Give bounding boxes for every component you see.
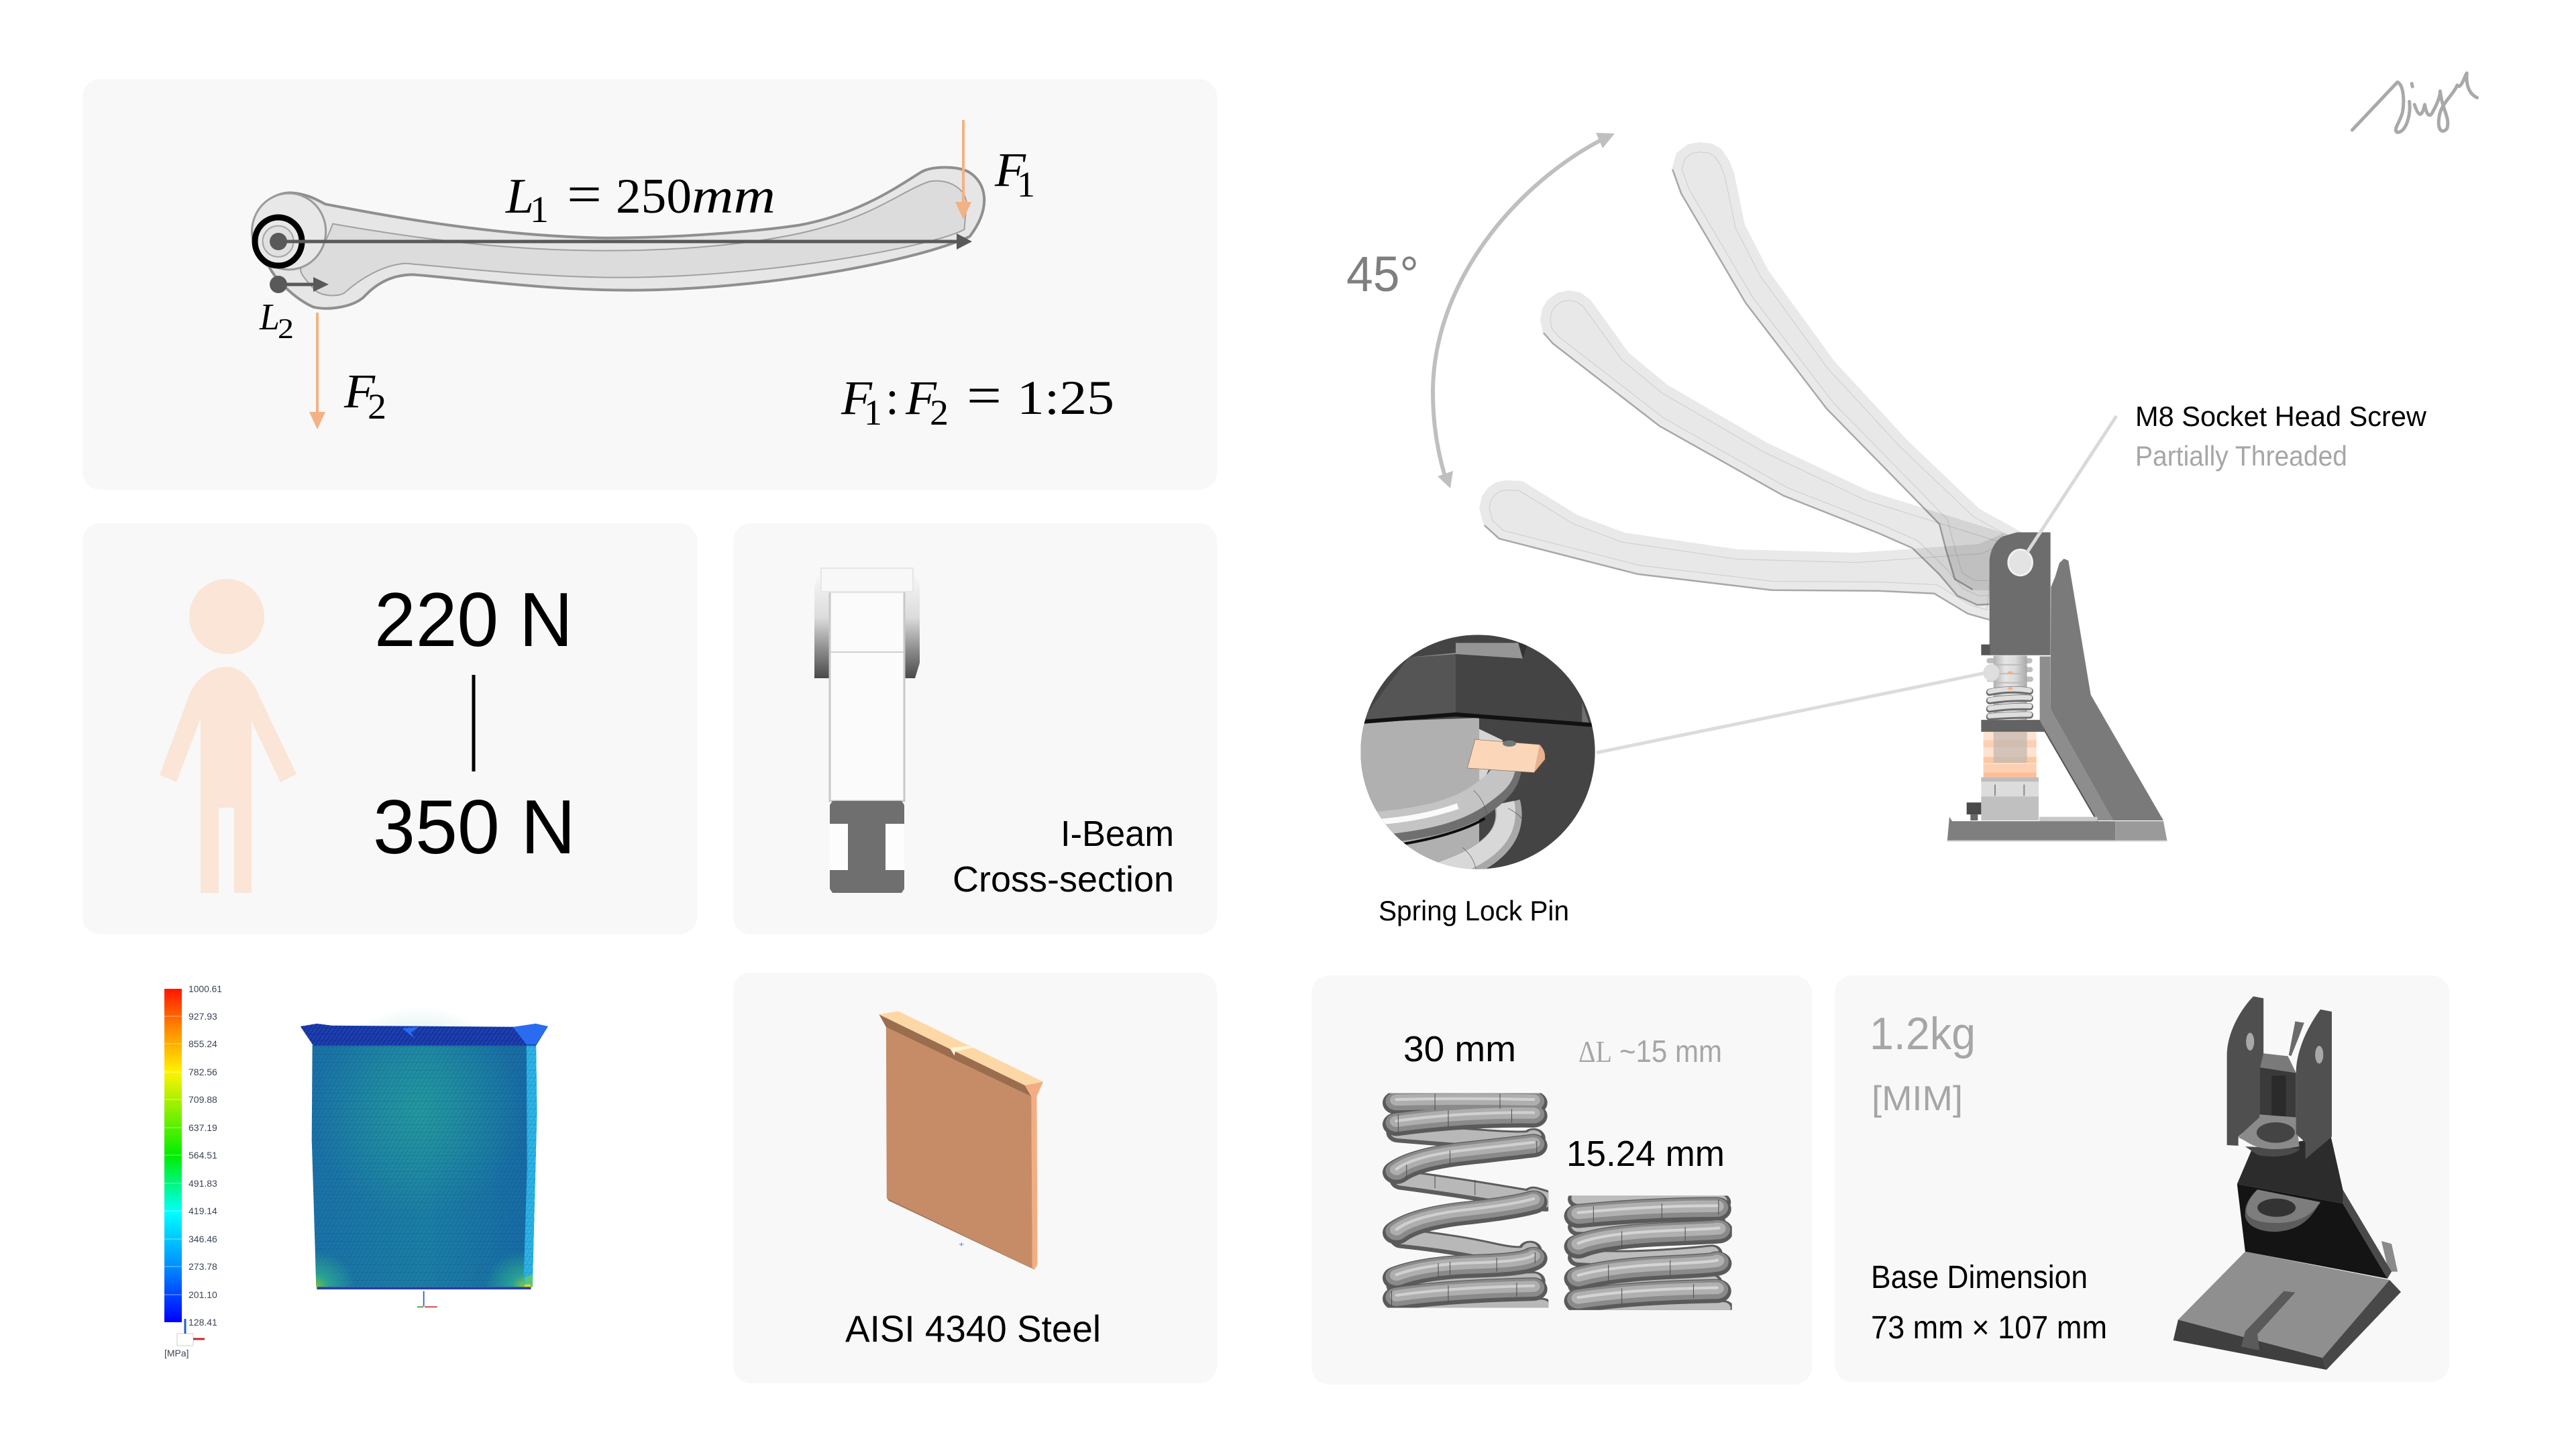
text: delta L: ΔL	[1578, 1034, 1612, 1069]
panel: material	[733, 973, 1217, 1383]
label: F1: 1	[1017, 164, 1035, 205]
label: F2	[343, 364, 386, 427]
chart: stress colour legend: 637.19	[189, 1122, 217, 1133]
text: delta L	[1578, 1034, 1722, 1069]
panel: I-beam cross-section	[733, 523, 1217, 934]
label: L1 = 250mm: mm	[692, 169, 775, 224]
lever arm diagram	[252, 120, 1114, 433]
label: L1 = 250mm	[505, 164, 775, 231]
text: I-Beam Cross-section	[953, 814, 1174, 900]
chart: stress colour legend: 346.46	[189, 1234, 217, 1244]
bracket assembly	[1947, 533, 2167, 841]
panel: applied force	[83, 523, 697, 934]
chart: stress colour legend: 419.14	[189, 1205, 217, 1216]
panel: base	[1835, 975, 2449, 1382]
chart: stress colour legend: 1000.61	[189, 983, 222, 994]
icon: M8 screw head	[2008, 549, 2033, 576]
icon: lever arm	[252, 167, 984, 309]
icon: signature	[2352, 73, 2477, 132]
fulcrum ring	[255, 217, 302, 266]
chart: stress colour legend: 273.78	[189, 1261, 217, 1272]
label: F1	[994, 143, 1035, 205]
label: force ratio: 2	[930, 392, 949, 433]
label: force ratio	[841, 365, 1114, 433]
label: force ratio: 1	[864, 392, 882, 433]
chart: stress colour legend: 782.56	[189, 1067, 217, 1077]
text: I-Beam Cross-section: Cross-section	[953, 859, 1174, 900]
label: force ratio: 1:25	[1017, 371, 1114, 425]
chart: stress colour legend: 564.51	[189, 1150, 217, 1161]
text: AISI 4340 Steel: AISI 4340 Steel	[845, 1307, 1101, 1350]
arrow: F2 force	[309, 313, 325, 429]
arm: lowered position	[1479, 480, 2004, 621]
label: L1 = 250mm: L	[505, 169, 534, 224]
label: L2	[259, 297, 294, 345]
label: L1 = 250mm: 250	[616, 169, 692, 224]
chart: stress colour legend: [MPa]	[164, 1348, 189, 1358]
arrow: L2 lever length	[270, 276, 329, 293]
arm: middle position	[1540, 290, 2016, 607]
label: F2: F	[343, 364, 376, 418]
text: base dimension: 73 mm × 107 mm	[1871, 1310, 2107, 1346]
text: base dimension	[1871, 1260, 2107, 1346]
label: L2: 2	[278, 314, 294, 345]
text: 30 mm: 30 mm	[1403, 1029, 1516, 1069]
text: screw label: Partially Threaded	[2135, 440, 2347, 472]
icon: steel plate section	[879, 1011, 1043, 1270]
panel: spring	[1311, 975, 1812, 1385]
icon: person	[160, 579, 297, 893]
icon: free spring	[1391, 1093, 1547, 1312]
panel: lever ratio	[83, 79, 1217, 490]
chart: stress colour legend: 201.10	[189, 1289, 217, 1300]
text: screw label	[2135, 400, 2427, 472]
icon: I-beam cross-section	[814, 568, 920, 893]
arrow: L1 lever length	[270, 233, 972, 250]
label: L1 = 250mm: 1	[530, 189, 549, 231]
text: I-Beam Cross-section: I-Beam	[1061, 814, 1174, 854]
label: L1 = 250mm: =	[567, 164, 602, 225]
text: 15.24 mm: 15.24 mm	[1566, 1134, 1725, 1174]
text: base dimension: Base Dimension	[1871, 1260, 2088, 1295]
chart: stress colour legend: 491.83	[189, 1178, 217, 1189]
arrow: F1 force	[955, 120, 971, 219]
text: delta L: ~15 mm	[1619, 1034, 1722, 1069]
lever arm positions	[1479, 142, 2021, 621]
text: 45 degrees: 45°	[1346, 246, 1419, 302]
text: weight: 1.2kg	[1870, 1008, 1976, 1059]
text: MIM: [MIM]	[1872, 1079, 1963, 1118]
base plate	[1947, 817, 2167, 841]
leader: screw callout	[2027, 416, 2116, 552]
arm: raised position	[1672, 142, 2021, 590]
spring shelf	[1981, 720, 2045, 732]
spring coil	[1989, 655, 2031, 720]
label: force ratio: =	[967, 365, 1002, 426]
text: screw label: M8 Socket Head Screw	[2135, 400, 2427, 432]
label: force ratio: F	[841, 371, 873, 425]
chart: stress analysis plate	[301, 1006, 548, 1307]
label: F2: 2	[368, 386, 386, 427]
spring lower housing	[1981, 732, 2039, 820]
icon: compressed spring	[1578, 1198, 1723, 1313]
divider line between forces	[472, 675, 475, 771]
stop block	[1981, 645, 1990, 655]
leader: spring pin callout	[1597, 673, 1986, 753]
arrow: rotation arc	[1433, 133, 1615, 488]
text: Spring Lock Pin: Spring Lock Pin	[1379, 895, 1569, 926]
label: L2: L	[259, 297, 280, 338]
inset: spring lock pin close-up	[1360, 635, 1595, 877]
chart: stress colour legend: 709.88	[189, 1094, 217, 1105]
bracket gusset	[2040, 559, 2163, 822]
text: 220 N: 220 N	[374, 578, 573, 663]
icon: base bracket isometric	[2174, 996, 2401, 1370]
label: F1: F	[994, 143, 1026, 197]
text: 350 N: 350 N	[373, 785, 576, 870]
T-bolt	[1967, 802, 1981, 820]
chart: stress colour legend: 855.24	[189, 1038, 217, 1049]
icon: spring pin marker	[1983, 664, 1999, 682]
pivot plate	[1990, 533, 2051, 655]
label: force ratio: :	[885, 371, 899, 425]
chart: stress colour legend	[164, 983, 222, 1358]
label: force ratio: F	[905, 371, 937, 425]
chart: stress colour legend: 128.41	[189, 1317, 217, 1328]
chart: stress colour legend: 927.93	[189, 1011, 217, 1022]
